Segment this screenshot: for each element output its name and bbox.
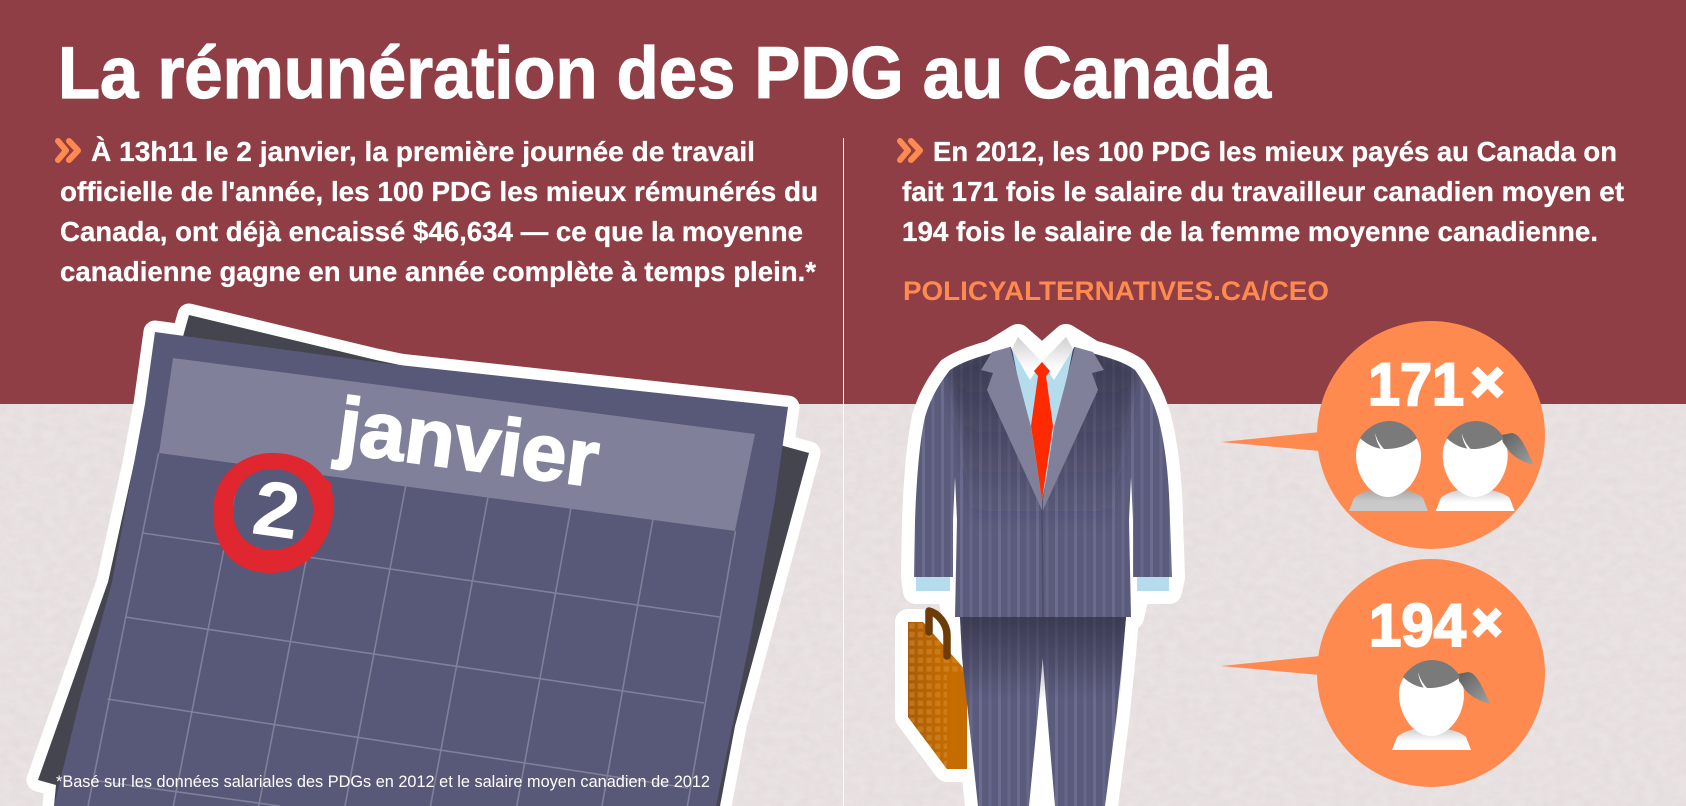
figure 194: 194 xyxy=(1369,592,1467,659)
suit figure with briefcase xyxy=(908,337,1172,806)
speech bubble: 171 times xyxy=(1221,321,1545,549)
shirt collar xyxy=(1012,337,1073,380)
icon: average worker, male xyxy=(1349,421,1428,511)
calendar month header band xyxy=(159,358,755,531)
white collar backing xyxy=(1010,345,1075,368)
icon: left chevrons xyxy=(58,141,78,160)
circled date number: 2 xyxy=(248,463,305,556)
multiplication sign 194: × xyxy=(1472,594,1502,652)
briefcase xyxy=(908,611,967,769)
divider xyxy=(843,138,844,806)
text block: left paragraph: À 13h11 le 2 janvier, la première journée de travail xyxy=(91,136,755,167)
text block: right paragraph: 194 fois le salaire de la femme moyenne canadienne. xyxy=(902,216,1598,247)
trousers xyxy=(960,617,1126,806)
jacket xyxy=(914,347,1172,617)
text block: right paragraph xyxy=(900,136,1624,247)
footnote: *Basé sur les données salariales des PDGs en 2012 et le salaire moyen canadien de 2012 xyxy=(56,773,710,791)
background: lower paper area xyxy=(0,404,1686,806)
icon: average worker, female xyxy=(1436,421,1534,511)
shirt cuffs xyxy=(916,577,1169,591)
multiplication sign 171: × xyxy=(1471,350,1504,413)
red necktie xyxy=(1031,362,1053,500)
calendar back sheet xyxy=(38,315,809,806)
red hand-drawn circle xyxy=(213,453,334,573)
text block: right paragraph: En 2012, les 100 PDG les mieux payés au Canada on xyxy=(933,136,1617,167)
icon: right chevrons xyxy=(900,141,920,160)
text block: left paragraph: canadienne gagne en une année complète à temps plein.* xyxy=(60,256,816,287)
calendar front sheet xyxy=(54,332,788,806)
background: top maroon band xyxy=(0,0,1686,404)
text block: left paragraph: Canada, ont déjà encaissé $46,634 — ce que la moyenne xyxy=(60,216,803,247)
calendar grid xyxy=(88,453,736,806)
text block: right paragraph: fait 171 fois le salaire du travailleur canadien moyen et xyxy=(902,176,1624,207)
white sticker outline xyxy=(908,337,1172,806)
text block: left paragraph: officielle de l'année, les 100 PDG les mieux rémunérés du xyxy=(60,176,818,207)
text block: left paragraph xyxy=(58,136,818,287)
speech bubble: 194 times xyxy=(1221,559,1545,787)
shirt xyxy=(1012,349,1073,500)
jacket chest shading xyxy=(948,350,1137,530)
calendar white outline xyxy=(38,315,809,806)
calendar illustration xyxy=(38,315,809,806)
jacket lapels xyxy=(981,347,1104,510)
icon: average woman xyxy=(1392,660,1490,750)
source link text: POLICYALTERNATIVES.CA/CEO xyxy=(903,276,1329,306)
figure 171: 171 xyxy=(1368,351,1464,418)
title: La rémunération des PDG au Canada xyxy=(58,33,1272,114)
calendar month label: janvier xyxy=(331,380,604,504)
